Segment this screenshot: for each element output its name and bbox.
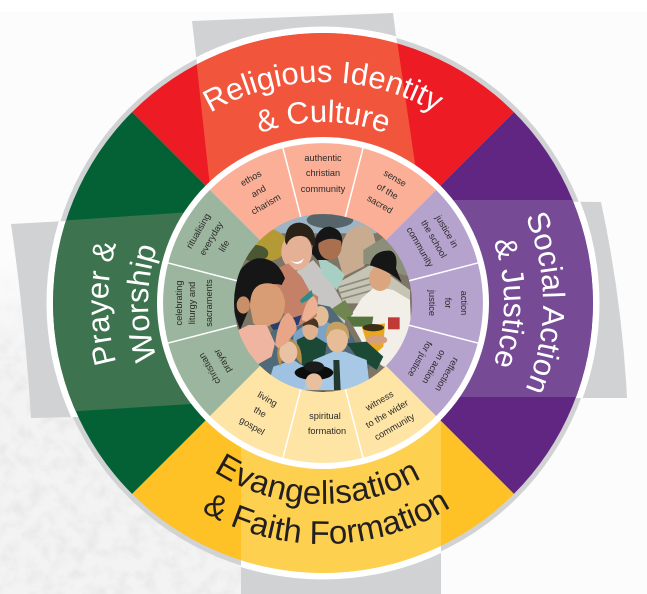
text: christian prayer: prayer [212, 347, 233, 375]
text: justice in the school community [405, 210, 462, 269]
text: witness to the wider community: to the wider [364, 398, 410, 430]
text: witness to the wider community: community [373, 411, 417, 442]
text: ethos and charism: and [249, 183, 268, 199]
heading: prayer and worship [91, 243, 160, 365]
text: living the gospel [238, 388, 282, 437]
text: living the gospel: the [252, 405, 268, 420]
panel: religious identity and culture [132, 33, 514, 186]
text: authentic christian community: authentic [304, 153, 342, 163]
text: living the gospel: gospel [238, 415, 266, 437]
text: reflection on action for justice: for justice [406, 339, 434, 379]
text: ritualising everyday life [184, 212, 238, 265]
segment dividers [165, 145, 481, 461]
text: reflection on action for justice: on action [420, 348, 448, 386]
text: spiritual formation: formation [308, 426, 346, 436]
text: reflection on action for justice [406, 339, 461, 394]
text: sense of the sacred: of the [375, 181, 400, 201]
panel: prayer and worship [53, 112, 206, 494]
text: christian prayer: christian [197, 351, 222, 386]
photo: students collage [230, 210, 417, 397]
text: sense of the sacred: sense [382, 168, 408, 189]
text: spiritual formation: spiritual [309, 411, 341, 421]
text: justice in the school community: the school [419, 218, 449, 260]
text: authentic christian community: community [301, 184, 346, 194]
text: spiritual formation [308, 411, 346, 436]
text: ethos and charism: charism [250, 192, 283, 217]
heading: prayer and worship: Worship [126, 246, 160, 364]
heading: social action and justice [495, 212, 566, 392]
inner white ring [157, 137, 489, 469]
text: action for justice [427, 289, 469, 316]
text: ethos and charism: ethos [239, 168, 264, 188]
panel: social action and justice [440, 112, 593, 494]
text: celebrating liturgy and sacraments: celebrating [174, 281, 184, 325]
text: action for justice: justice [427, 289, 437, 316]
text: celebrating liturgy and sacraments: sacraments [204, 279, 214, 327]
text: justice in the school community: community [405, 225, 436, 269]
text: witness to the wider community [356, 385, 418, 443]
heading: religious identity and culture: & Culture [258, 100, 388, 132]
text: ethos and charism [235, 166, 283, 217]
text: celebrating liturgy and sacraments [174, 279, 214, 327]
text: justice in the school community: justice in [433, 213, 460, 249]
grey outer ring [48, 28, 598, 578]
text: ritualising everyday life: ritualising [184, 212, 212, 250]
text: celebrating liturgy and sacraments: liturgy and [187, 282, 197, 324]
text: sense of the sacred [366, 167, 409, 215]
text: ritualising everyday life: life [217, 238, 232, 254]
text: reflection on action for justice: reflection [433, 356, 460, 393]
heading: religious identity and culture: Religious Identity [202, 62, 444, 113]
white ring over the grey panels [46, 26, 600, 580]
panel: evangelisation and faith formation [132, 420, 514, 573]
heading: evangelisation and faith formation [204, 453, 450, 544]
heading: social action and justice: & Justice [495, 240, 524, 366]
heading: evangelisation and faith formation: Evangelisation [216, 453, 420, 509]
heading: evangelisation and faith formation: & Faith Formation [204, 494, 450, 544]
inner wheel segments [163, 143, 483, 463]
heading: social action and justice: Social Action [526, 212, 566, 392]
text: action for justice: for [443, 298, 453, 308]
background: faint marble texture [0, 300, 241, 594]
text: action for justice: action [459, 291, 469, 315]
text: christian prayer [197, 344, 235, 386]
heading: prayer and worship: Prayer & [91, 243, 116, 365]
text: authentic christian community [301, 153, 346, 194]
text: living the gospel: living [256, 390, 279, 409]
text: witness to the wider community: witness [363, 389, 396, 413]
text: sense of the sacred: sacred [366, 193, 394, 215]
text: authentic christian community: christian [306, 168, 340, 178]
text: ritualising everyday life: everyday [198, 220, 225, 257]
